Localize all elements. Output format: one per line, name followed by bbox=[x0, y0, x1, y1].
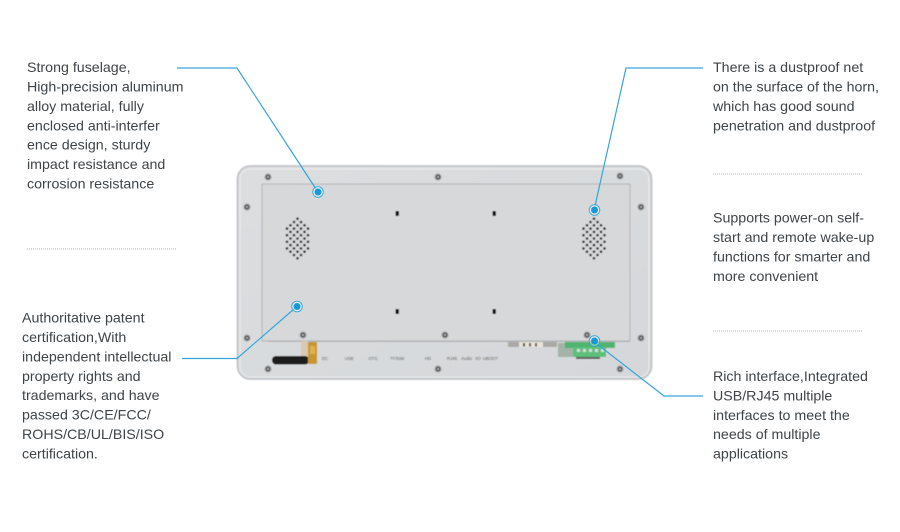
text: patent certification: passed 3C/CE/FCC/ bbox=[22, 408, 151, 424]
antenna bbox=[272, 341, 317, 364]
text: patent certification: trademarks, and have bbox=[22, 388, 160, 404]
device: rear panel bbox=[238, 166, 652, 379]
port labels: I/O bbox=[475, 356, 482, 361]
text: strong fuselage: ence design, sturdy bbox=[27, 138, 151, 154]
back cover plate bbox=[262, 184, 630, 341]
text: power-on self-start: functions for smarter and bbox=[713, 250, 870, 266]
text: strong fuselage: alloy material, fully bbox=[27, 99, 145, 115]
port labels: UBOOT bbox=[483, 356, 499, 361]
text: rich interface: USB/RJ45 multiple bbox=[713, 388, 832, 404]
hotspot: speaker bbox=[589, 205, 600, 215]
text: patent certification: Authoritative patent bbox=[22, 310, 145, 326]
text: patent certification: property rights and bbox=[22, 369, 141, 385]
leader line: top left bbox=[177, 68, 316, 189]
hotspot: interfaces bbox=[589, 336, 600, 346]
text: power-on self-start: start and remote wake-up bbox=[713, 230, 874, 246]
text: strong fuselage: corrosion resistance bbox=[27, 176, 154, 192]
port labels: USB bbox=[345, 356, 354, 361]
hotspot: casing bbox=[313, 187, 323, 197]
text: patent certification: certification,With bbox=[22, 330, 126, 346]
text: strong fuselage: High-precision aluminum bbox=[27, 80, 183, 96]
serial and USB connectors bbox=[508, 342, 557, 347]
text: dustproof net: on the surface of the horn, bbox=[713, 80, 879, 96]
text: strong fuselage: impact resistance and bbox=[27, 157, 165, 173]
port labels: OTG bbox=[368, 356, 378, 361]
port strip bbox=[268, 340, 630, 343]
text: strong fuselage: Strong fuselage, bbox=[27, 60, 131, 76]
green terminal block bbox=[558, 342, 615, 359]
text: dustproof net: There is a dustproof net bbox=[713, 60, 863, 76]
text: rich interface: applications bbox=[713, 446, 788, 462]
text: rich interface: needs of multiple bbox=[713, 427, 821, 443]
leader line: bottom right bbox=[597, 344, 703, 396]
text: rich interface: interfaces to meet the bbox=[713, 408, 850, 424]
text: power-on self-start: more convenient bbox=[713, 269, 818, 285]
port labels bbox=[322, 356, 499, 361]
left speaker grille bbox=[286, 217, 309, 260]
port labels: Audio bbox=[461, 356, 473, 361]
text: rich interface: Rich interface,Integrated bbox=[713, 369, 868, 385]
screws bbox=[243, 172, 645, 373]
text: patent certification: independent intellectual bbox=[22, 350, 171, 366]
text: power-on self-start: Supports power-on self- bbox=[713, 210, 864, 226]
right speaker grille bbox=[582, 217, 606, 260]
text: patent certification: ROHS/CB/UL/BIS/ISO bbox=[22, 427, 164, 443]
text: patent certification: certification. bbox=[22, 446, 98, 462]
hotspot: certification bbox=[292, 301, 302, 312]
text: dustproof net: penetration and dustproof bbox=[713, 118, 875, 134]
inner casing edge bbox=[240, 169, 649, 377]
port labels: DC bbox=[322, 356, 328, 361]
port labels: RJ45 bbox=[447, 356, 458, 361]
leader line: bottom left bbox=[182, 309, 294, 358]
port labels: HD bbox=[425, 356, 431, 361]
device casing bbox=[238, 166, 652, 379]
text: dustproof net: which has good sound bbox=[712, 99, 855, 115]
leader line: top right bbox=[595, 68, 703, 206]
mounting holes bbox=[396, 211, 496, 314]
text: strong fuselage: enclosed anti-interfer bbox=[27, 118, 160, 134]
port labels: TF/SIM bbox=[390, 356, 404, 361]
